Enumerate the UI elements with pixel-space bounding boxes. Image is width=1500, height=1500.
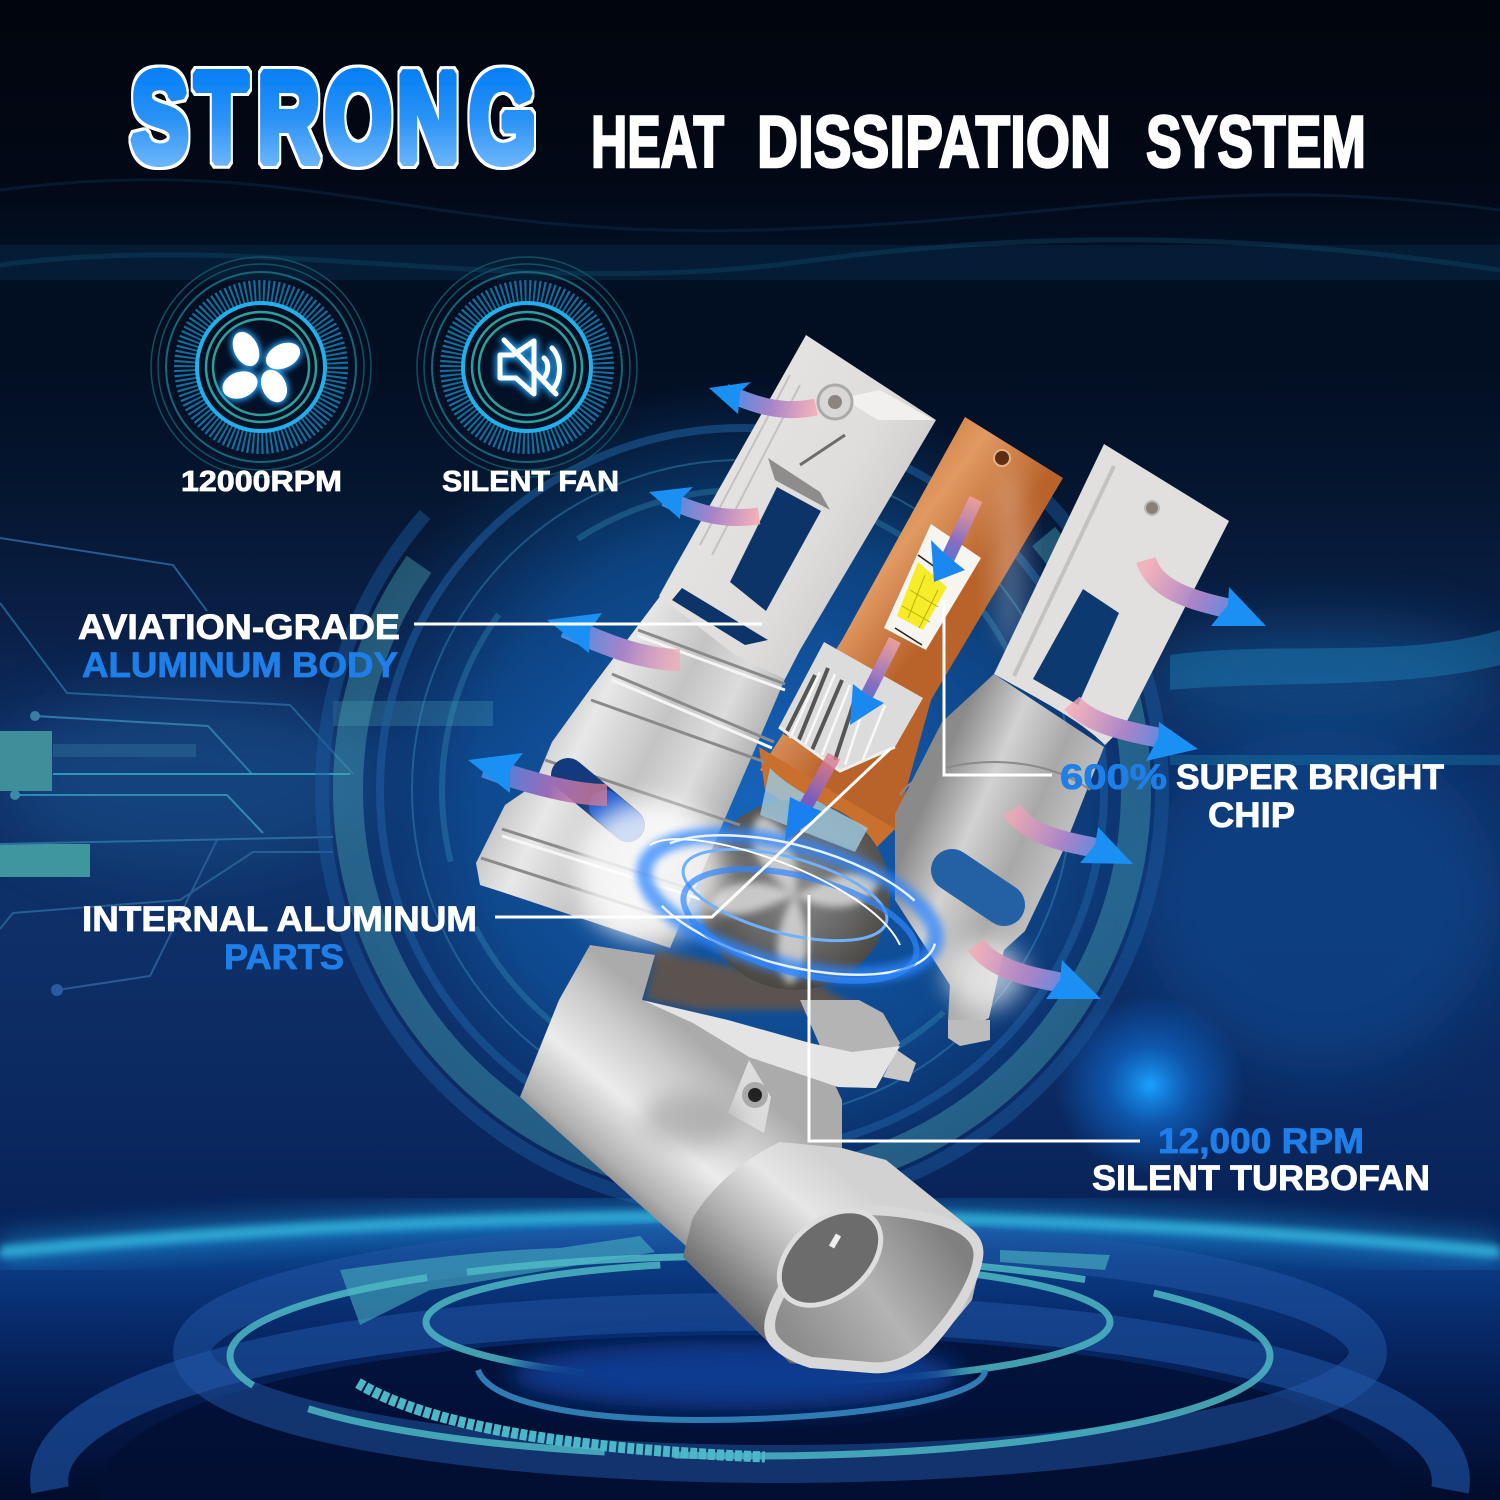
bottom glowing platform: [0, 1216, 1500, 1500]
leader line: turbofan: [809, 895, 1140, 1141]
arrow left 4: [468, 753, 607, 795]
title: heat dissipation system: SYSTEM: [1146, 102, 1366, 183]
arrow left 3: [547, 613, 680, 660]
callout: 600% super bright chip: 600%: [1060, 758, 1167, 797]
right housing: [895, 444, 1229, 1037]
heat sink fins: [779, 642, 923, 771]
muted speaker symbol: [500, 340, 560, 394]
connector socket opening: [761, 1192, 983, 1373]
elbow connector: [520, 945, 983, 1373]
callout: 12,000 rpm silent turbofan: 12,000 RPM: [1158, 1122, 1364, 1161]
arrow right 3: [1012, 810, 1133, 864]
LED chip: [884, 524, 981, 650]
arrow down into fan: [785, 756, 834, 841]
left arm: [659, 335, 936, 679]
swirl airflow: [630, 808, 950, 1002]
callout: internal aluminum parts: PARTS: [224, 938, 344, 977]
arrow down through heat sink: [850, 640, 895, 725]
callout: aviation-grade aluminum body: [78, 608, 400, 685]
label: silent fan: SILENT FAN: [442, 466, 619, 498]
callout: internal aluminum parts: INTERNAL ALUMINUM: [82, 900, 477, 939]
locking collar: [642, 1000, 916, 1088]
leader line: bright chip: [944, 600, 1052, 775]
title: heat dissipation system: HEAT: [591, 102, 724, 183]
leader line: internal aluminum parts: [495, 749, 890, 917]
heat flow arrows: [468, 382, 1266, 999]
product: LED headlight bulb: [476, 335, 1229, 1373]
callout: 12,000 rpm silent turbofan: [1092, 1122, 1430, 1198]
callout: aviation-grade aluminum body: AVIATION-GRADE: [78, 608, 400, 647]
arrow right 2: [1072, 703, 1198, 761]
callout: 600% super bright chip: CHIP: [1208, 796, 1295, 835]
callout: 12,000 rpm silent turbofan: SILENT TURBOFAN: [1092, 1159, 1430, 1198]
callout: aviation-grade aluminum body: ALUMINUM BODY: [82, 646, 398, 685]
left housing: [476, 591, 785, 948]
label: 12000RPM: 12000RPM: [181, 466, 342, 498]
title: heat dissipation system: [591, 102, 1366, 183]
callout: internal aluminum parts: [82, 900, 477, 977]
PCB board: [759, 417, 1063, 856]
background concentric tech rings: [322, 370, 1162, 1210]
callout: 600% super bright chip: [1060, 758, 1444, 835]
icon: fan badge: [151, 257, 371, 477]
icon: silent fan badge: [417, 257, 637, 477]
right locating peg: [948, 1020, 990, 1046]
callout: 600% super bright chip: SUPER BRIGHT: [1176, 758, 1444, 797]
arrow top left 1: [709, 382, 816, 414]
leader line: aluminum body: [414, 622, 762, 626]
fan blades: [219, 328, 304, 406]
arrow down through chip: [931, 499, 976, 582]
title: STRONG: STRONG: [131, 46, 536, 188]
arrow right 4: [976, 945, 1101, 999]
turbo fan core: [645, 768, 890, 1010]
arrow top left 2: [649, 487, 759, 519]
title: heat dissipation system: DISSIPATION: [757, 102, 1111, 183]
arrow right 1: [1146, 560, 1266, 626]
